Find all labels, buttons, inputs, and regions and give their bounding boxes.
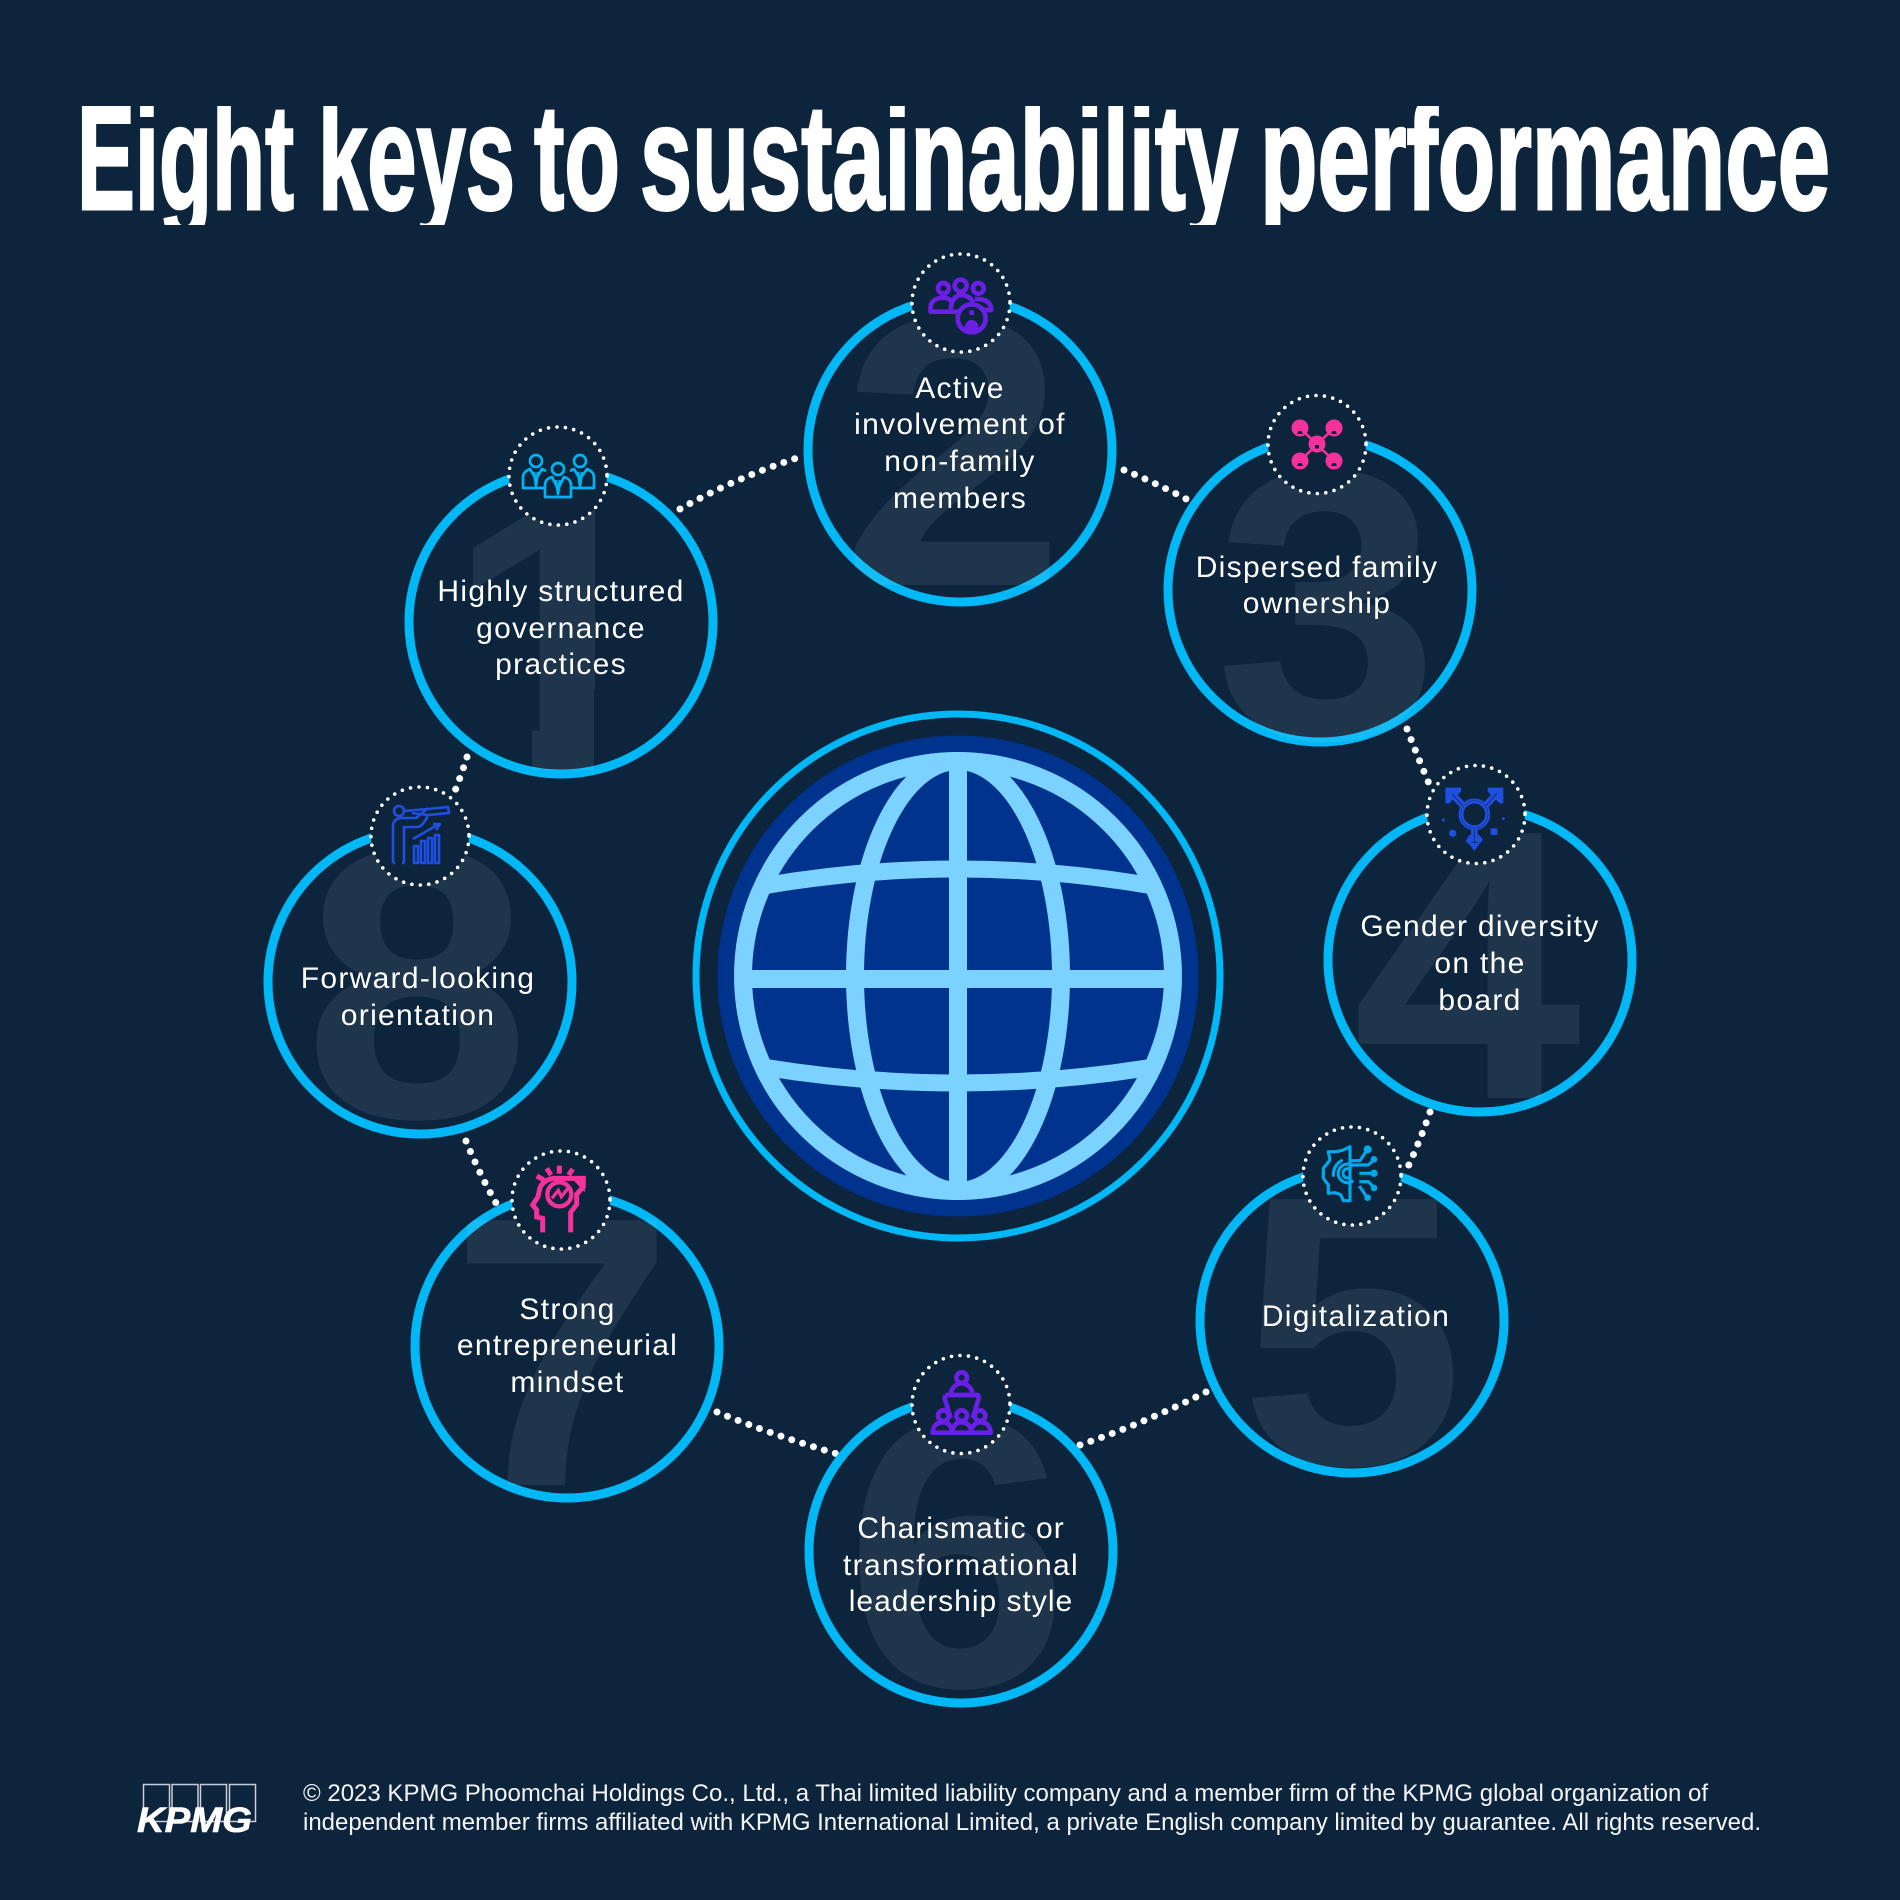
- label 7: entrepreneurial: [457, 1329, 678, 1362]
- label 5: Digitalization: [1262, 1300, 1450, 1333]
- label 8: Forward-looking: [301, 962, 535, 995]
- connector: 1 to 2: [680, 457, 800, 509]
- connector: 2 to 3: [1124, 470, 1190, 501]
- label 2: involvement of: [854, 408, 1066, 441]
- label 2: members: [893, 482, 1027, 515]
- number 4: 4: [1352, 750, 1584, 1180]
- panel: key 6: [804, 1354, 1118, 1708]
- title: [82, 106, 1828, 225]
- label 4: board: [1438, 984, 1522, 1017]
- label 6: leadership style: [849, 1585, 1073, 1618]
- title: to: [534, 73, 620, 241]
- icon: business team: [523, 455, 594, 497]
- panel: key 7: [410, 1149, 724, 1502]
- icon: gear with circuit: [1323, 1145, 1378, 1201]
- title: sustainability: [640, 73, 1238, 241]
- panel: key 2: [804, 252, 1116, 606]
- center globe: [696, 714, 1220, 1238]
- label 4: Gender diversity: [1360, 910, 1600, 943]
- icon: gender symbol: [1442, 788, 1505, 851]
- connector: 4 to 5: [1405, 1112, 1430, 1173]
- label 6: Charismatic or: [857, 1512, 1065, 1545]
- label 7: Strong: [519, 1293, 616, 1326]
- globe grid lines: [743, 761, 1173, 1191]
- connector: 5 to 6: [1080, 1392, 1206, 1445]
- globe outer ring: [696, 714, 1220, 1238]
- label 3: ownership: [1243, 587, 1391, 620]
- number 1: 1: [445, 422, 670, 852]
- KPMG logo: KPMG: [137, 1801, 252, 1840]
- label 2: non-family: [884, 445, 1036, 478]
- KPMG logo: [137, 1784, 256, 1840]
- icon: people group with person: [930, 280, 991, 332]
- panel: key 4: [1324, 764, 1636, 1116]
- copyright text: independent member firms affiliated with KPMG International Limited, a private English company limited by guarantee. All rights reserved.: [303, 1809, 1761, 1836]
- number 2: 2: [841, 237, 1065, 667]
- icon: speaker at podium: [933, 1372, 991, 1433]
- panel: key 8: [264, 785, 576, 1138]
- icon: entrepreneurial mind: [533, 1166, 585, 1232]
- title: Eight: [77, 73, 294, 241]
- label 3: Dispersed family: [1196, 551, 1438, 584]
- globe disc: [718, 736, 1198, 1216]
- icon: forward looking telescope and chart: [393, 806, 449, 863]
- icon: drone network: [1292, 420, 1342, 470]
- copyright text: © 2023 KPMG Phoomchai Holdings Co., Ltd., a Thai limited liability company and a member firm of the KPMG global organization of: [303, 1780, 1708, 1807]
- connector: 8 to 1: [453, 757, 467, 796]
- number 3: 3: [1215, 390, 1439, 820]
- label 7: mindset: [510, 1366, 625, 1399]
- label 6: transformational: [843, 1549, 1079, 1582]
- title: keys: [318, 73, 515, 241]
- connector: 7 to 8: [466, 1141, 496, 1203]
- number 8: 8: [304, 770, 530, 1199]
- label 1: Highly structured: [437, 575, 685, 608]
- panel: key 1: [404, 425, 718, 778]
- panel: key 3: [1164, 394, 1476, 746]
- connector: 6 to 7: [717, 1412, 841, 1455]
- number 5: 5: [1240, 1116, 1464, 1546]
- connector: 3 to 4: [1407, 729, 1430, 786]
- panel: key 5: [1196, 1125, 1508, 1478]
- label 8: orientation: [341, 999, 495, 1032]
- number 6: 6: [845, 1338, 1069, 1768]
- label 4: on the: [1434, 947, 1526, 980]
- number 7: 7: [450, 1137, 674, 1567]
- label 1: governance: [476, 612, 646, 645]
- label 1: practices: [495, 648, 627, 681]
- label 2: Active: [915, 372, 1005, 405]
